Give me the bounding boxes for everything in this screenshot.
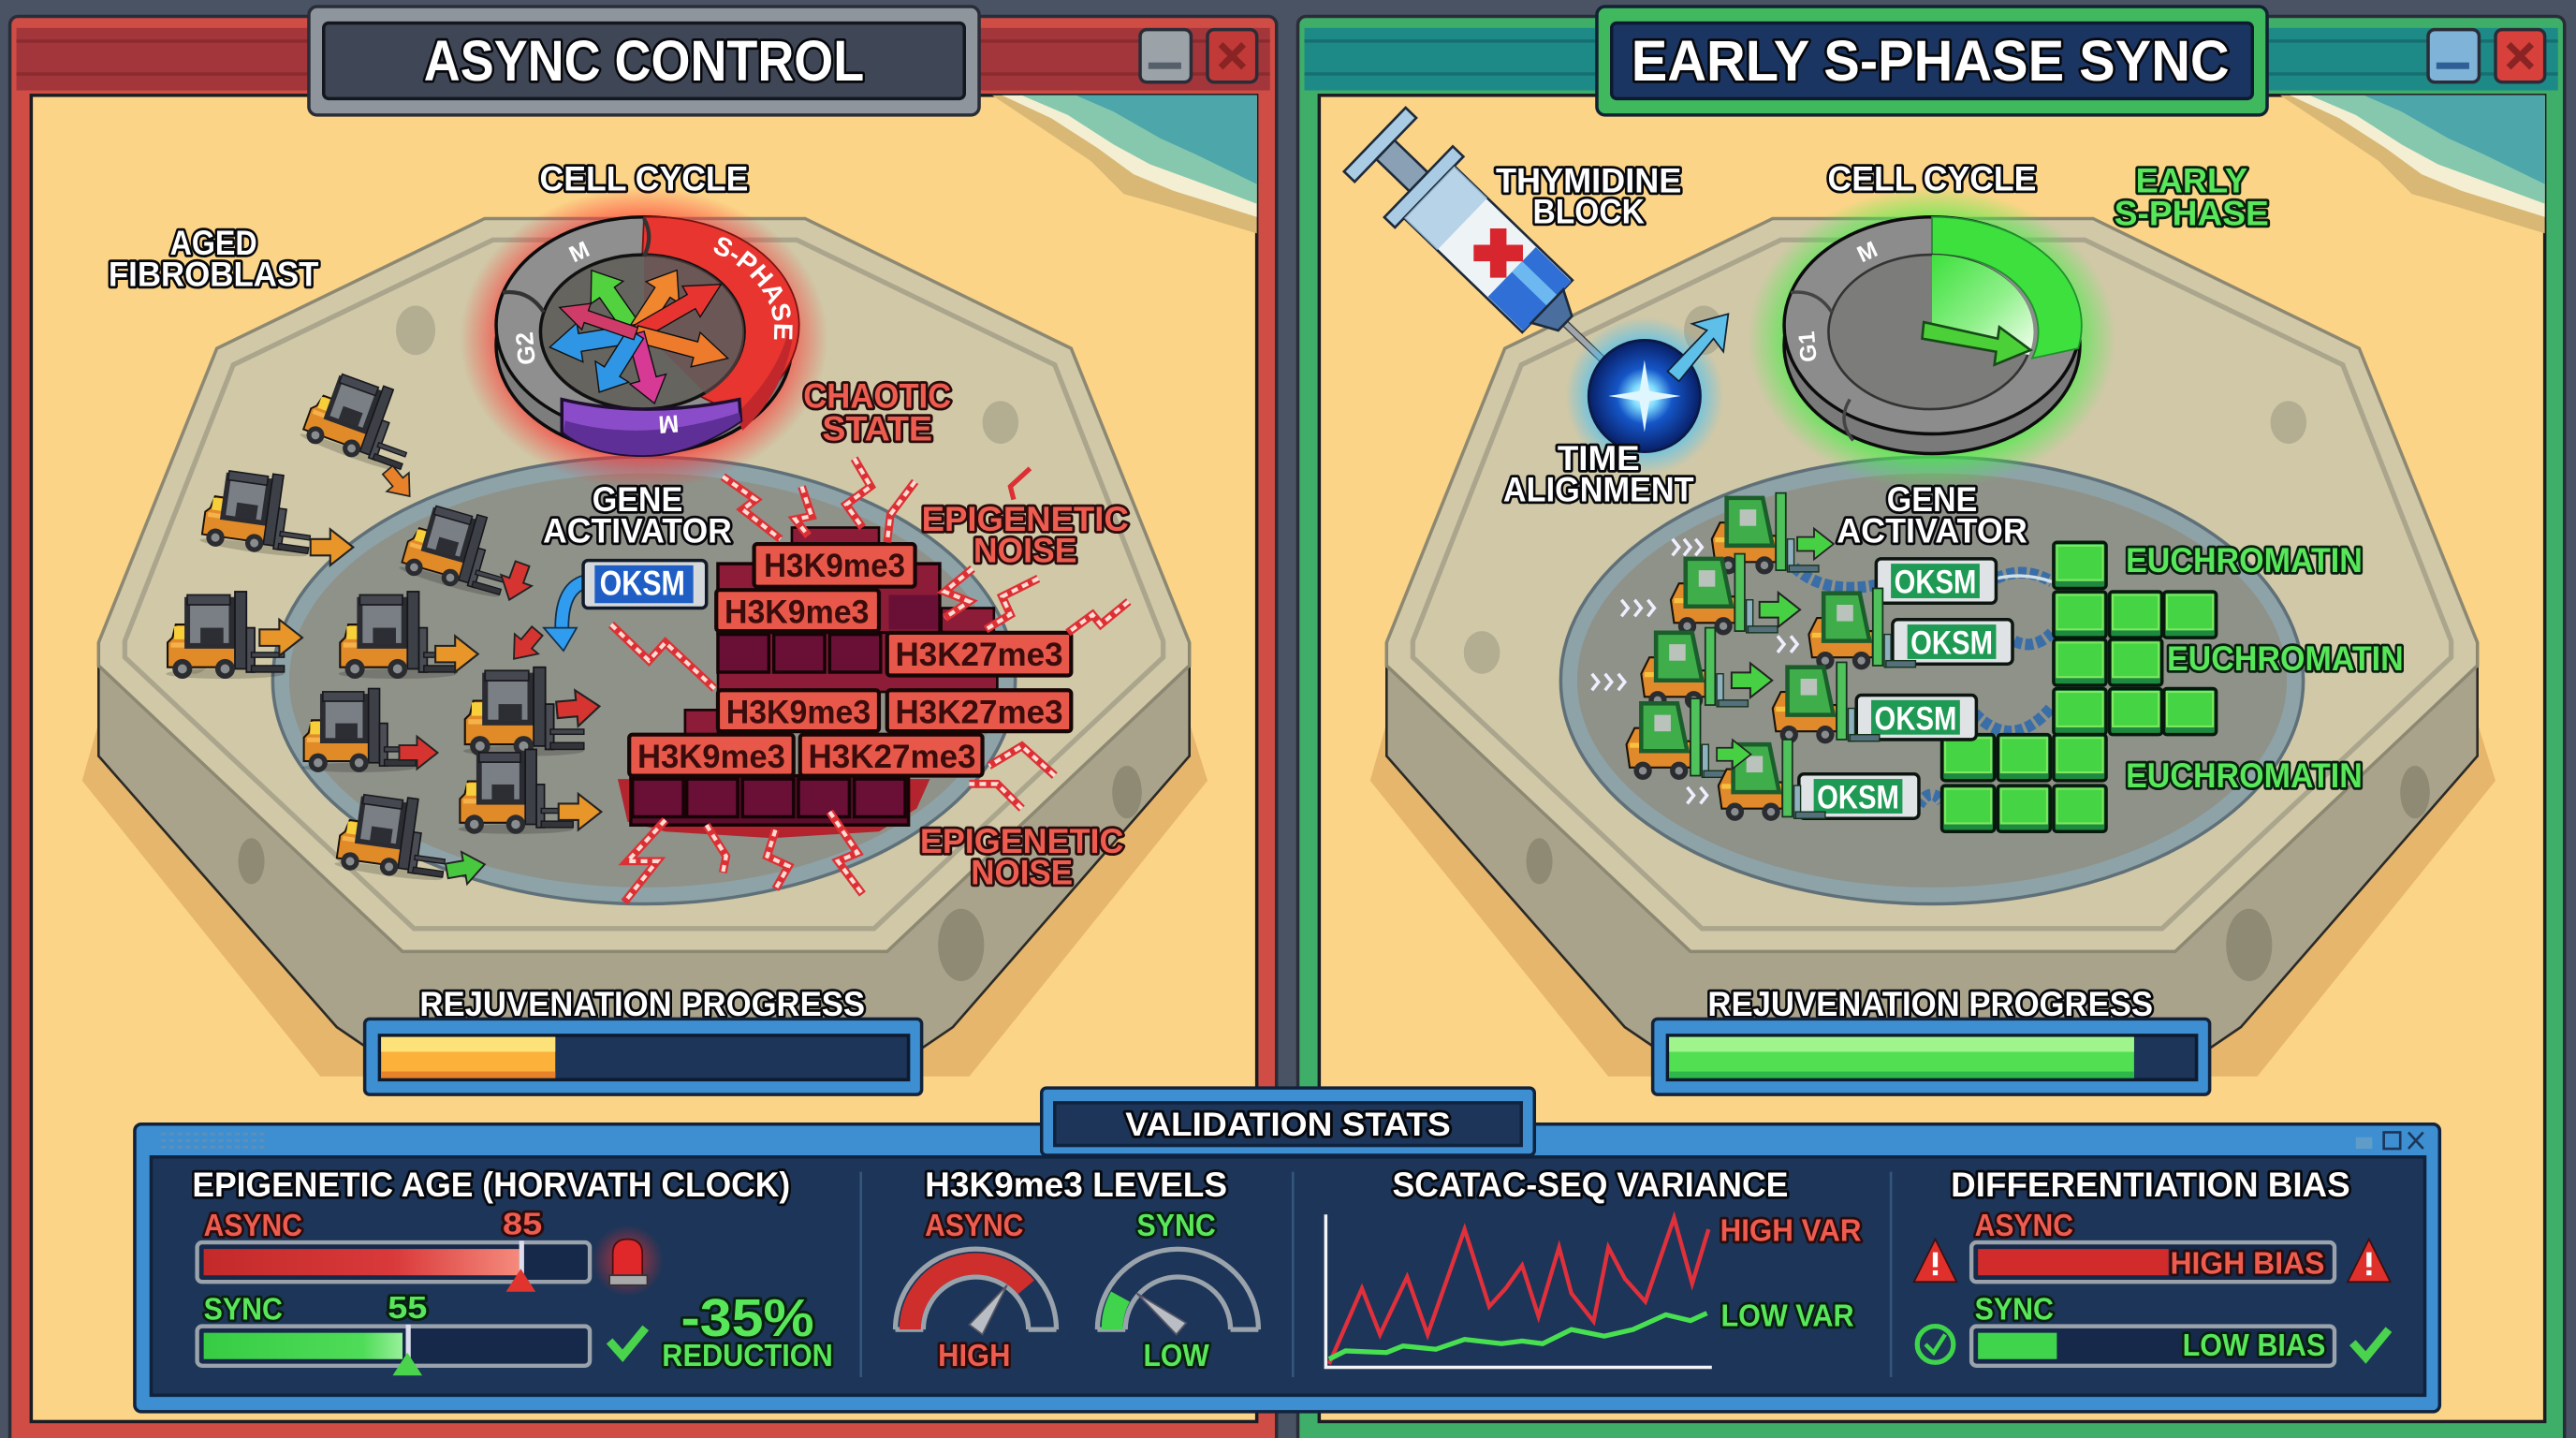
label: aged fibroblast [109,224,319,293]
label: epigenetic noise top [922,500,1129,569]
chart labels [1720,1213,1862,1334]
label: time alignment [1503,439,1694,508]
label: gene activator: GENE [593,480,682,519]
label: chaotic state: CHAOTIC [803,376,951,415]
OKSM 4: OKSM [1817,780,1899,816]
section: scatac-seq variance: SCATAC-SEQ VARIANCE [1392,1166,1788,1204]
cell cycle wheel chaotic: G2 [510,330,541,366]
label: epigenetic noise top: EPIGENETIC [922,500,1129,538]
H3K9me3 tag 1: H3K9me3 [764,548,905,584]
H3K9me3 tag 3: H3K9me3 [726,694,871,730]
window frame [10,17,1277,1438]
H3K9me3 tag 2: H3K9me3 [724,594,869,630]
sync bias bar: LOW BIAS [2183,1328,2325,1363]
labels: euchromatin: EUCHROMATIN [2167,639,2404,678]
labels: euchromatin: EUCHROMATIN [2126,756,2363,795]
label: gene activator [543,480,732,550]
label: cell cycle: CELL CYCLE [1828,160,2036,198]
async bias bar: ASYNC [1975,1209,2073,1243]
euchromatin open blocks [1942,542,2217,831]
async age bar: ASYNC [204,1209,302,1243]
H3K27me3 tag 2: H3K27me3 [896,694,1063,730]
gauge sync: SYNC [1137,1209,1216,1243]
async age bar [198,1207,590,1292]
H3K27me3 tag 1: H3K27me3 [896,637,1063,673]
green forklifts aligned [1627,493,1915,821]
label: gene activator: GENE [1887,480,1977,519]
cell cycle wheel synchronized: G1 [1794,330,1822,363]
stats frame [135,1124,2439,1412]
icon: check [609,1328,646,1356]
label: aged fibroblast: FIBROBLAST [109,255,319,293]
line chart [1325,1214,1712,1368]
label: gene activator: ACTIVATOR [1837,511,2027,550]
label: time alignment: ALIGNMENT [1503,470,1694,508]
OKSM blue: OKSM [600,564,685,602]
gauge sync [1097,1209,1258,1373]
cell cycle wheel chaotic: S-PHASE [713,237,793,339]
OKSM 2: OKSM [1910,625,1993,662]
rejuvenation progress sync [1653,985,2210,1094]
rejuvenation progress async: REJUVENATION PROGRESS [419,985,865,1023]
async age bar: 85 [503,1207,542,1241]
chart labels: HIGH VAR [1720,1213,1862,1248]
heterochromatin wall [618,527,997,838]
cell cycle wheel synchronized [1748,187,2116,490]
label: time alignment: TIME [1558,439,1640,477]
window buttons [2428,30,2545,82]
H3K labels [629,544,1071,776]
window frame [1298,17,2565,1438]
window buttons [1140,30,1257,82]
title plate: ASYNC CONTROL [424,29,864,94]
async bias bar: HIGH BIAS [2170,1246,2324,1281]
section: epigenetic age: EPIGENETIC AGE (HORVATH CLOCK) [192,1166,790,1204]
sync bias bar: SYNC [1975,1293,2054,1328]
async bias bar [1971,1209,2334,1282]
section: epigenetic age [192,1166,833,1375]
title plate [1597,7,2267,115]
gauge sync: LOW [1144,1339,1209,1373]
label: epigenetic noise bottom: NOISE [971,853,1073,891]
cell cycle wheel chaotic [463,189,825,486]
title plate: EARLY S-PHASE SYNC [1632,29,2230,94]
panel: validation stats [135,1088,2439,1412]
chevron motion marks [1592,539,1797,803]
label: thymidine block [1496,161,1681,231]
panel: early s-phase sync window [1298,7,2565,1438]
section: differentiation bias: DIFFERENTIATION BIAS [1951,1166,2350,1204]
heading tab: VALIDATION STATS [1125,1107,1451,1143]
OKSM green pills [1799,559,2012,818]
cell body [82,218,1208,1077]
chart labels: LOW VAR [1720,1299,1854,1334]
H3K27me3 tag 3: H3K27me3 [809,739,976,775]
chaotic arrows [547,259,732,408]
label: cell cycle: CELL CYCLE [540,160,748,198]
label: thymidine block: THYMIDINE [1496,161,1681,199]
DNA strands [1794,567,2052,805]
OKSM blue [583,561,707,609]
label: aged fibroblast: AGED [170,224,257,262]
label: chaotic state: STATE [822,409,932,448]
section: h3k9me3 levels [896,1166,1258,1373]
label: epigenetic noise top: NOISE [973,531,1076,569]
beach water [992,95,1257,233]
OKSM 4 [1799,774,1919,818]
icon: syringe [1340,104,1659,416]
reduction stat: REDUCTION [662,1339,833,1373]
OKSM 1 [1876,559,1996,603]
label: chaotic state [803,376,951,448]
OKSM 3: OKSM [1875,700,1956,737]
sync bias bar [1971,1293,2334,1366]
icon: warning right [2348,1240,2391,1282]
sync age bar: SYNC [204,1293,283,1328]
panel: async control window [7,5,1279,1438]
section: differentiation bias [1914,1166,2391,1366]
rejuvenation progress sync: REJUVENATION PROGRESS [1707,985,2153,1023]
label: epigenetic noise bottom: EPIGENETIC [920,822,1123,860]
OKSM 3 [1856,696,1976,740]
cell cycle wheel synchronized: M [1853,237,1881,268]
title plate [309,7,979,115]
gauge async: HIGH [938,1339,1010,1373]
labels: euchromatin [2126,541,2404,795]
section: h3k9me3 levels: H3K9me3 LEVELS [925,1166,1227,1204]
epigenetic noise lightning [611,459,1129,902]
label: early s-phase: S-PHASE [2115,194,2269,232]
icon: check [2352,1329,2389,1357]
icon: alarm [592,1225,664,1297]
rejuvenation progress async [365,985,922,1094]
H3K9me3 tag 4: H3K9me3 [637,739,785,775]
reduction stat: -35% [681,1288,814,1347]
cell cycle wheel chaotic: M [657,409,680,439]
icon: warning left [1914,1240,1956,1282]
label: early s-phase [2115,161,2269,232]
label: gene activator [1837,480,2027,550]
cell body [1370,218,2496,1077]
blocked arrows near OKSM [502,581,585,668]
label: early s-phase: EARLY [2136,161,2247,199]
label: thymidine block: BLOCK [1533,193,1645,231]
sync age bar: 55 [388,1291,427,1326]
reduction stat [662,1288,833,1373]
OKSM 2 [1893,620,2012,664]
gauge async: ASYNC [925,1209,1023,1243]
heading tab [1042,1088,1534,1155]
labels: euchromatin: EUCHROMATIN [2126,541,2363,580]
gauge async [896,1209,1057,1373]
section: scatac-seq variance [1325,1166,1862,1368]
label: gene activator: ACTIVATOR [543,511,732,550]
icon: time alignment orb [1566,314,1728,475]
icon: badge check [1917,1327,1954,1362]
sync age bar [198,1291,590,1375]
forklifts random directions [166,365,601,887]
beach water [2280,95,2545,233]
label: epigenetic noise bottom [920,822,1123,891]
cell cycle wheel chaotic: M [565,237,593,268]
OKSM 1: OKSM [1895,565,1976,601]
